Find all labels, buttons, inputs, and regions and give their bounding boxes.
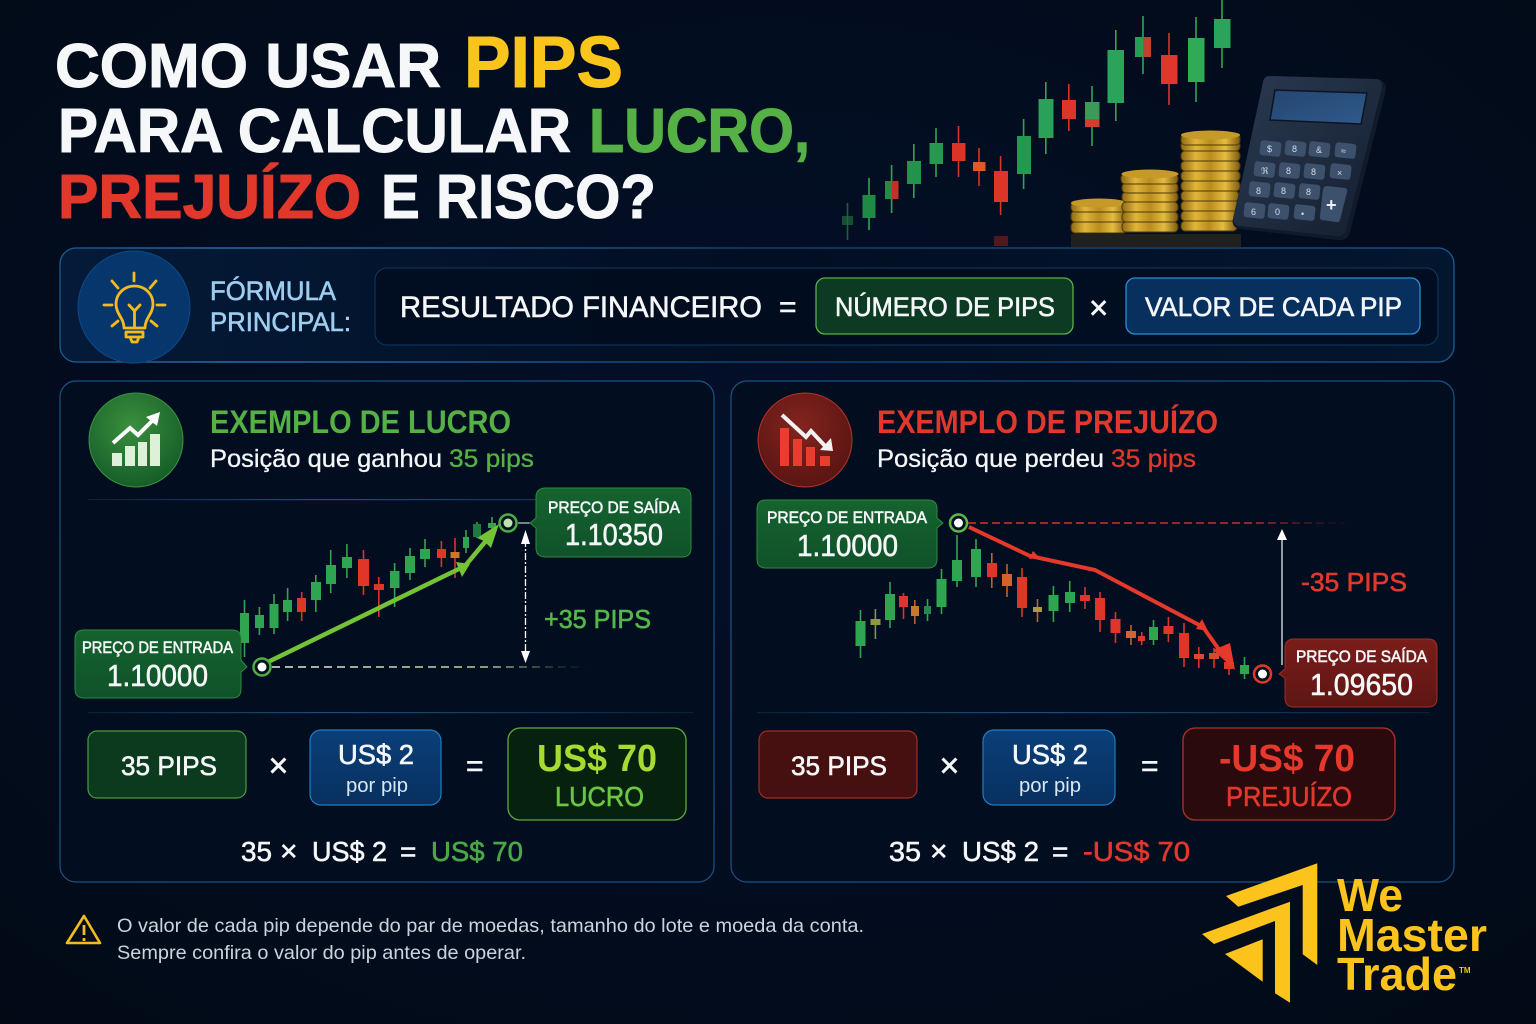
result box: loss: PREJUÍZO bbox=[1226, 781, 1352, 812]
equation: profit: × bbox=[280, 835, 298, 868]
logo: We Master Trade: TM bbox=[1459, 966, 1471, 975]
icon: calculator: ≈ bbox=[1341, 146, 1346, 156]
equation: loss: 35 bbox=[889, 836, 921, 867]
pip value box: por pip bbox=[1019, 775, 1081, 797]
callout: entry price: PREÇO DE ENTRADA bbox=[767, 508, 928, 527]
formula expression: × bbox=[1089, 289, 1108, 326]
subheading: loss: 35 pips bbox=[1111, 445, 1196, 473]
callout: exit price: PREÇO DE SAÍDA bbox=[1296, 647, 1428, 666]
equation: profit: = bbox=[400, 836, 416, 867]
icon: calculator: 8 bbox=[1286, 166, 1291, 176]
loss candlestick chart bbox=[856, 535, 1249, 679]
callout: exit price: PREÇO DE SAÍDA bbox=[548, 498, 681, 517]
title: PIPS bbox=[464, 23, 623, 103]
title: LUCRO, bbox=[589, 97, 810, 166]
pip value box bbox=[310, 730, 441, 805]
formula expression: NÚMERO DE PIPS bbox=[835, 291, 1055, 322]
icon: calculator: 8 bbox=[1311, 167, 1316, 177]
title bbox=[55, 23, 810, 232]
gold coin stacks bbox=[1071, 130, 1241, 247]
callout: entry price bbox=[75, 630, 247, 698]
equation: profit: US$ 70 bbox=[431, 836, 523, 867]
arrow: price rises bbox=[268, 524, 499, 662]
callout: entry price bbox=[757, 500, 943, 568]
icon: calculator: & bbox=[1316, 145, 1322, 155]
panel: loss example bbox=[731, 381, 1454, 882]
callout: entry price: PREÇO DE ENTRADA bbox=[82, 638, 234, 657]
multiply sign: × bbox=[268, 747, 288, 785]
formula expression: = bbox=[779, 291, 797, 324]
arrow: +35 pips range bbox=[518, 523, 530, 663]
icon: calculator: ℜ bbox=[1261, 166, 1269, 176]
result box: profit: LUCRO bbox=[555, 781, 644, 812]
equation: profit bbox=[241, 835, 523, 868]
formula label: FÓRMULA bbox=[210, 275, 336, 306]
callout: exit price: 1.10350 bbox=[565, 517, 663, 552]
exit marker bbox=[500, 514, 516, 532]
callout: exit price: 1.09650 bbox=[1310, 667, 1413, 702]
dashed entry level bbox=[272, 666, 585, 668]
pips box: 35 PIPS bbox=[791, 751, 887, 781]
entry marker bbox=[254, 658, 270, 676]
pip value box: US$ 2 bbox=[338, 739, 414, 770]
equation: loss: -US$ 70 bbox=[1083, 836, 1190, 867]
logo: We Master Trade bbox=[1202, 863, 1487, 1003]
callout: entry price: 1.10000 bbox=[107, 658, 208, 693]
equals sign: = bbox=[466, 750, 484, 783]
equation: profit: US$ 2 bbox=[312, 836, 387, 867]
icon: calculator: 8 bbox=[1306, 187, 1311, 197]
dashed entry level bbox=[968, 522, 1345, 524]
result box: profit bbox=[508, 728, 686, 820]
title: E RISCO? bbox=[381, 163, 656, 232]
callout: entry price: 1.10000 bbox=[797, 528, 898, 563]
icon: rising chart bbox=[89, 393, 183, 487]
pips box: 35 PIPS bbox=[121, 751, 217, 781]
equation: loss: US$ 2 bbox=[962, 836, 1039, 867]
subheading: profit: Posição que ganhou bbox=[210, 445, 442, 473]
title: PARA CALCULAR bbox=[58, 97, 571, 166]
icon: warning bbox=[67, 916, 100, 943]
equals sign: = bbox=[1141, 750, 1159, 783]
subheading: loss bbox=[877, 445, 1196, 473]
icon: calculator: • bbox=[1301, 209, 1304, 219]
icon: calculator: × bbox=[1337, 168, 1342, 178]
equation: profit: 35 bbox=[241, 836, 272, 867]
equation: loss: = bbox=[1052, 836, 1068, 867]
arrow: -35 pips range bbox=[1277, 529, 1287, 665]
pip value box: US$ 2 bbox=[1012, 739, 1088, 770]
footnote: Sempre confira o valor do pip antes de operar. bbox=[117, 942, 526, 964]
callout: exit price bbox=[1279, 639, 1437, 707]
heading: profit: EXEMPLO DE LUCRO bbox=[210, 404, 511, 440]
pips box bbox=[88, 731, 246, 798]
title: PREJUÍZO bbox=[58, 163, 361, 232]
pip value box bbox=[983, 730, 1115, 805]
result box: loss bbox=[1183, 728, 1395, 820]
panel: main formula bbox=[60, 248, 1454, 363]
entry marker bbox=[950, 514, 967, 532]
heading: loss: EXEMPLO DE PREJUÍZO bbox=[877, 404, 1218, 440]
formula label: PRINCIPAL: bbox=[210, 307, 351, 337]
formula expression: VALOR DE CADA PIP bbox=[1145, 292, 1402, 322]
subheading: loss: Posição que perdeu bbox=[877, 445, 1104, 473]
pip value box: por pip bbox=[346, 775, 408, 797]
result box: loss: -US$ 70 bbox=[1219, 738, 1355, 780]
pips box bbox=[759, 731, 917, 798]
logo: We Master Trade: Trade bbox=[1337, 948, 1457, 1000]
equation: loss: × bbox=[930, 835, 948, 868]
panel: profit example bbox=[60, 381, 714, 882]
profit candlestick chart bbox=[240, 517, 496, 657]
footnote: O valor de cada pip depende do par de moedas, tamanho do lote e moeda da conta. bbox=[117, 915, 864, 937]
logo: We Master Trade: Master bbox=[1337, 909, 1487, 961]
icon: calculator: 8 bbox=[1281, 186, 1286, 196]
subheading: profit: 35 pips bbox=[449, 445, 534, 473]
exit marker bbox=[1254, 666, 1271, 682]
icon: calculator: + bbox=[1326, 195, 1337, 215]
icon: calculator: 8 bbox=[1292, 144, 1297, 154]
arrow: price falls bbox=[969, 527, 1235, 670]
equation: loss bbox=[889, 835, 1190, 868]
icon: calculator: 0 bbox=[1275, 207, 1280, 217]
logo: We Master Trade: We bbox=[1337, 869, 1403, 921]
icon: calculator: 8 bbox=[1256, 186, 1261, 196]
label: -35 pips: -35 PIPS bbox=[1301, 567, 1407, 597]
title: COMO USAR bbox=[55, 32, 441, 101]
icon: light bulb bbox=[78, 251, 190, 363]
formula label bbox=[210, 275, 351, 337]
formula expression bbox=[375, 268, 1438, 345]
result box: profit: US$ 70 bbox=[537, 738, 657, 780]
icon: calculator: 6 bbox=[1251, 207, 1256, 217]
multiply sign: × bbox=[940, 747, 959, 785]
formula expression: RESULTADO FINANCEIRO bbox=[400, 291, 762, 324]
icon: calculator: $ bbox=[1267, 144, 1272, 154]
callout: exit price bbox=[530, 488, 691, 557]
icon: calculator bbox=[1233, 76, 1386, 240]
footnote bbox=[117, 915, 864, 964]
icon: falling chart bbox=[758, 393, 852, 487]
label: +35 pips: +35 PIPS bbox=[544, 604, 651, 634]
hero candlestick chart bbox=[842, 0, 1230, 246]
